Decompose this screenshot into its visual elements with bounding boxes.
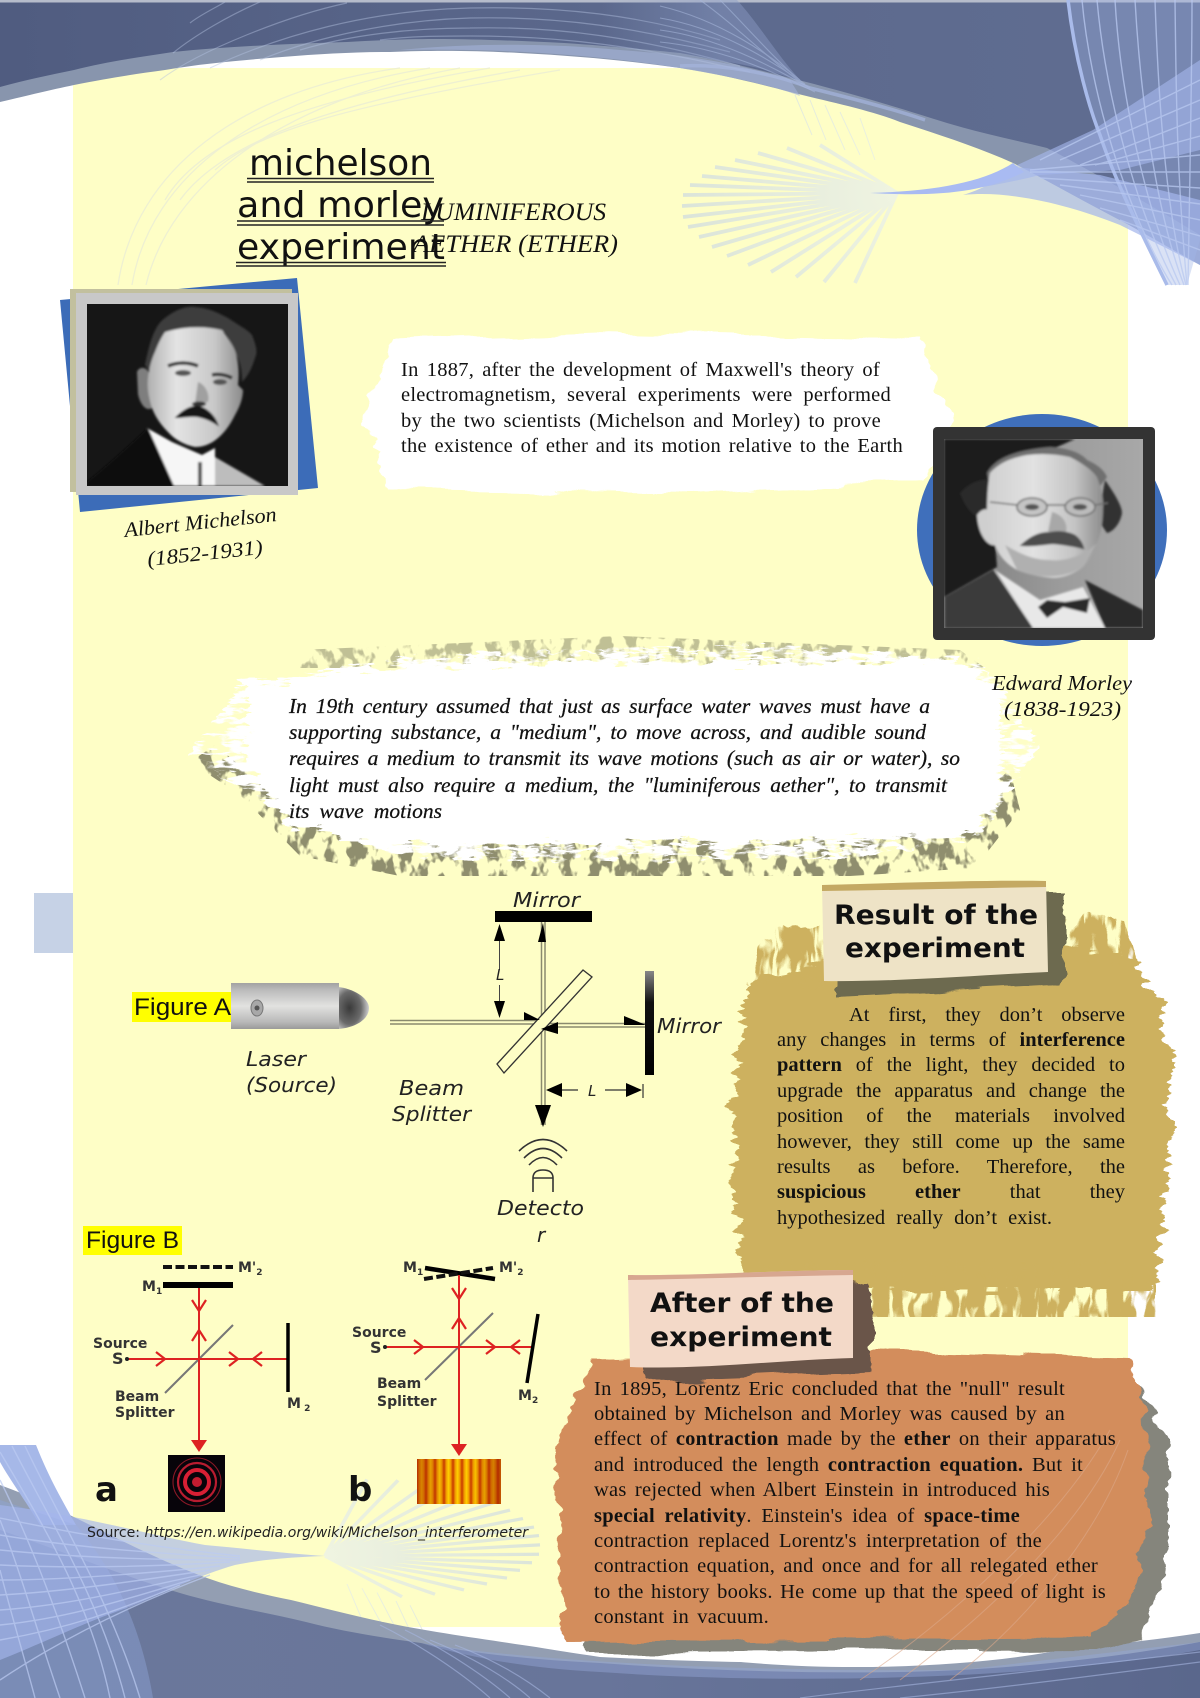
text block: after the experiment <box>594 1378 1116 1628</box>
result heading tag <box>822 881 1064 997</box>
ribbon mesh bottom left <box>0 1445 325 1698</box>
caption: Edward Morley: Edward Morley <box>991 671 1133 695</box>
interferometer figure A: Splitter <box>392 1102 473 1126</box>
title: experiment <box>237 227 445 268</box>
icon: detector <box>519 1140 567 1192</box>
interferometer figure A: Laser <box>246 1047 308 1071</box>
interferometer diagram a: 2 <box>256 1268 262 1278</box>
text block: aether assumption: light must also require a medium, the "luminiferous aether", to transmit <box>289 773 947 797</box>
subtitle: AETHER (ETHER) <box>411 231 618 258</box>
interferometer diagram b: b <box>348 1470 372 1510</box>
interferometer diagram b: Beam <box>377 1376 421 1392</box>
faint arcs on yellow <box>118 68 560 285</box>
interferometer diagram b <box>348 1260 538 1510</box>
after heading tag <box>628 1270 872 1381</box>
title: michelson <box>249 143 432 184</box>
figure A label: Figure A <box>134 994 231 1021</box>
interferometer diagram b: 2 <box>517 1268 523 1278</box>
text block: result of the experiment: pattern of the light, they decided to <box>777 1054 1125 1076</box>
header band <box>0 0 1200 265</box>
text block: aether assumption: its wave motions <box>289 799 442 823</box>
torn white aether blob <box>190 636 1040 876</box>
interferometer diagram a: 2 <box>301 1404 310 1414</box>
text block: aether assumption: supporting substance, a "medium", to move across, and audible sound <box>289 720 926 744</box>
text block: result of the experiment: however, they still come up the same <box>777 1131 1125 1153</box>
source citation: Source: https://en.wikipedia.org/wiki/Michelson_interferometer <box>87 1525 529 1541</box>
text block: after the experiment: In 1895, Lorentz Eric concluded that the "null" result <box>594 1378 1065 1400</box>
interferometer figure A: (Source) <box>246 1073 337 1097</box>
text block: after the experiment: was rejected when Albert Einstein in introduced his <box>594 1479 1050 1501</box>
text block: intro 1887: In 1887, after the development of Maxwell's theory of <box>401 358 880 380</box>
text block: after the experiment: constant in vacuum. <box>594 1606 769 1628</box>
title: and morley <box>237 185 444 226</box>
text block: after the experiment: and introduced the length contraction equation. But it <box>594 1454 1083 1476</box>
text block: aether assumption <box>288 694 960 823</box>
fan pattern top <box>682 95 897 283</box>
portrait: Albert Michelson <box>60 278 318 512</box>
interferometer diagram a: M' <box>238 1260 256 1276</box>
interferometer figure A <box>246 888 723 1247</box>
text block: after the experiment: effect of contraction made by the ether on their apparatus <box>594 1428 1116 1450</box>
text block: result of the experiment: hypothesized really don’t exist. <box>777 1207 1052 1229</box>
after heading tag: After of the <box>650 1288 834 1319</box>
text block: result of the experiment: At first, they don’t observe <box>849 1004 1125 1026</box>
text block: after the experiment: special relativity. Einstein's idea of space-time <box>594 1505 1020 1527</box>
caption: Albert Michelson <box>121 502 278 571</box>
interferometer diagram a: 1 <box>156 1287 162 1297</box>
interferometer diagram b: 2 <box>532 1396 538 1406</box>
laser source <box>231 983 369 1029</box>
text block: result of the experiment: upgrade the apparatus and change the <box>777 1080 1125 1102</box>
interferometer diagram a <box>93 1260 310 1512</box>
text block: intro 1887 <box>401 358 903 457</box>
subtitle <box>411 199 618 258</box>
caption: Edward Morley <box>991 671 1133 721</box>
fan pattern bottom <box>325 1479 540 1639</box>
result heading tag: experiment <box>845 933 1025 964</box>
title <box>236 143 446 268</box>
interferometer diagram b: S <box>370 1338 382 1357</box>
text block: after the experiment: contraction replaced Lorentz's interpretation of the <box>594 1530 1042 1552</box>
text block: result of the experiment: position of the materials involved <box>777 1105 1125 1127</box>
interferometer diagram a: S <box>112 1349 124 1368</box>
text block: result of the experiment: any changes in terms of interference <box>777 1029 1125 1051</box>
text block: result of the experiment: suspicious ether that they <box>777 1181 1125 1203</box>
text block: aether assumption: requires a medium to transmit its wave motions (such as air or water), so <box>289 746 960 770</box>
text block: result of the experiment <box>777 1004 1125 1229</box>
interferometer diagram b: M <box>518 1388 532 1404</box>
caption: Edward Morley: (1838-1923) <box>1004 697 1121 721</box>
gold result panel <box>733 912 1170 1330</box>
white intro blob <box>362 333 952 494</box>
interferometer diagram b: M <box>403 1260 417 1276</box>
interference fringes <box>417 1459 501 1504</box>
ribbon mesh top right <box>870 0 1200 285</box>
interference rings <box>168 1455 225 1512</box>
interferometer figure A: Mirror <box>657 1014 723 1038</box>
interferometer diagram a: M <box>287 1396 301 1412</box>
subtitle: LUMINIFEROUS <box>420 199 607 226</box>
caption: Albert Michelson: (1852-1931) <box>146 535 264 571</box>
text block: intro 1887: the existence of ether and its motion relative to the Earth <box>401 435 903 457</box>
interferometer figure A: r <box>537 1223 547 1247</box>
text block: result of the experiment: results as before. Therefore, the <box>777 1156 1125 1178</box>
interferometer diagram a: a <box>95 1470 118 1510</box>
interferometer diagram b: Source <box>352 1325 406 1341</box>
interferometer diagram b: M' <box>499 1260 517 1276</box>
interferometer diagram b: Splitter <box>377 1394 437 1410</box>
interferometer figure A: L <box>588 1082 596 1100</box>
orange after panel <box>557 1350 1168 1680</box>
result heading tag: Result of the <box>834 900 1038 931</box>
interferometer diagram a: Source <box>93 1336 147 1352</box>
interferometer figure A: Mirror <box>513 888 582 912</box>
interferometer diagram a: Beam <box>115 1389 159 1405</box>
text block: after the experiment: obtained by Michelson and Morley was caused by an <box>594 1403 1065 1425</box>
light blue side tab <box>34 893 73 953</box>
text block: after the experiment: to the history books. He come up that the speed of light is <box>594 1581 1106 1603</box>
caption: Albert Michelson: Albert Michelson <box>121 502 278 542</box>
text block: aether assumption: In 19th century assumed that just as surface water waves must have a <box>289 694 930 718</box>
after heading tag: experiment <box>650 1322 832 1353</box>
interferometer figure A: L <box>496 966 504 984</box>
interferometer figure A: Beam <box>399 1076 464 1100</box>
interferometer diagram b: 1 <box>417 1268 423 1278</box>
figure B label: Figure B <box>86 1227 179 1254</box>
text block: after the experiment: contraction equation, and once and for all relegated ether <box>594 1555 1098 1577</box>
footer band <box>0 1485 1200 1698</box>
interferometer diagram a: Splitter <box>115 1405 175 1421</box>
interferometer diagram a: M <box>142 1279 156 1295</box>
text block: intro 1887: electromagnetism, several experiments were performed <box>401 384 891 406</box>
text block: intro 1887: by the two scientists (Michelson and Morley) to prove <box>401 410 881 432</box>
interferometer figure A: Detecto <box>497 1196 584 1220</box>
portrait: Edward Morley <box>917 414 1167 646</box>
